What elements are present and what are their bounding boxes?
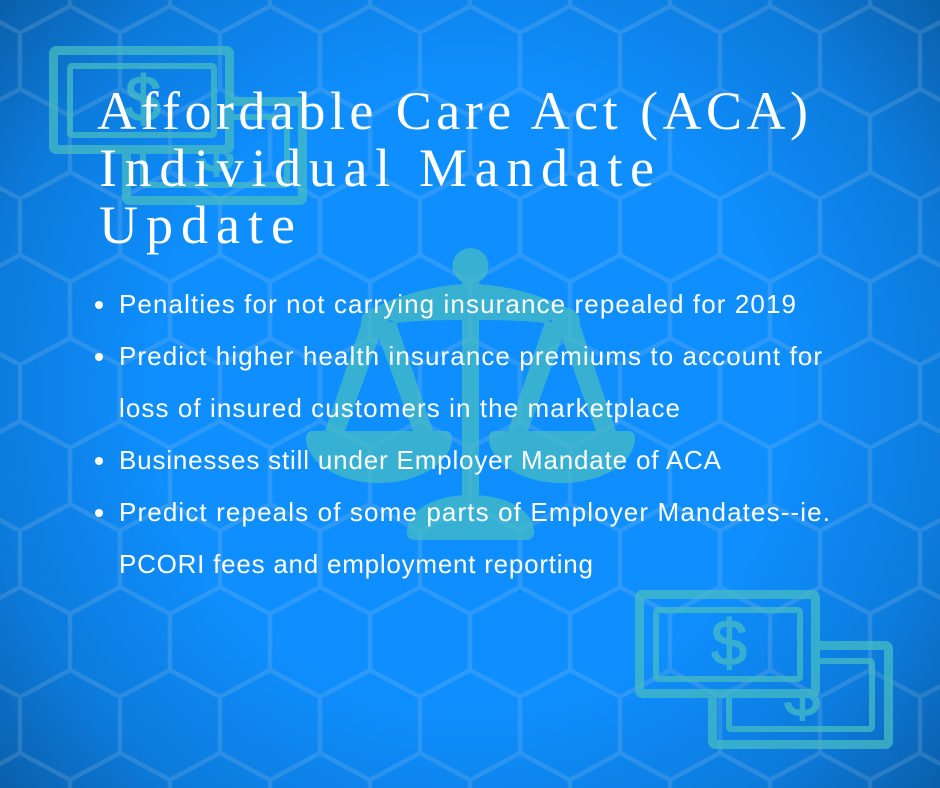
icon: money bills top left: $ xyxy=(125,63,161,135)
bullet: higher premiums xyxy=(95,341,822,423)
title: Update xyxy=(99,195,295,255)
bullet list xyxy=(95,289,830,579)
bullet: employer mandate: Businesses still under Employer Mandate of ACA xyxy=(119,445,722,475)
title: Affordable Care Act (ACA) xyxy=(97,81,808,141)
title: Individual Mandate xyxy=(99,138,654,198)
icon: money bills top left: $ xyxy=(198,114,234,186)
bullet: predicted repeals: Predict repeals of some parts of Employer Mandates--ie. xyxy=(119,497,830,527)
icon: money bills top left xyxy=(54,50,302,200)
bullet: higher premiums: Predict higher health insurance premiums to account for xyxy=(119,341,822,371)
bullet: predicted repeals: PCORI fees and employment reporting xyxy=(119,549,593,579)
icon: money bills bottom right: $ xyxy=(711,607,747,679)
icon: money bills bottom right: $ xyxy=(784,658,820,730)
bullet: penalties repealed: Penalties for not carrying insurance repealed for 2019 xyxy=(119,289,796,319)
bullet: predicted repeals xyxy=(95,497,830,579)
bullet: higher premiums: loss of insured customers in the marketplace xyxy=(119,393,680,423)
title xyxy=(97,81,808,255)
icon: balance scales xyxy=(306,248,635,540)
icon: money bills bottom right xyxy=(640,594,888,744)
